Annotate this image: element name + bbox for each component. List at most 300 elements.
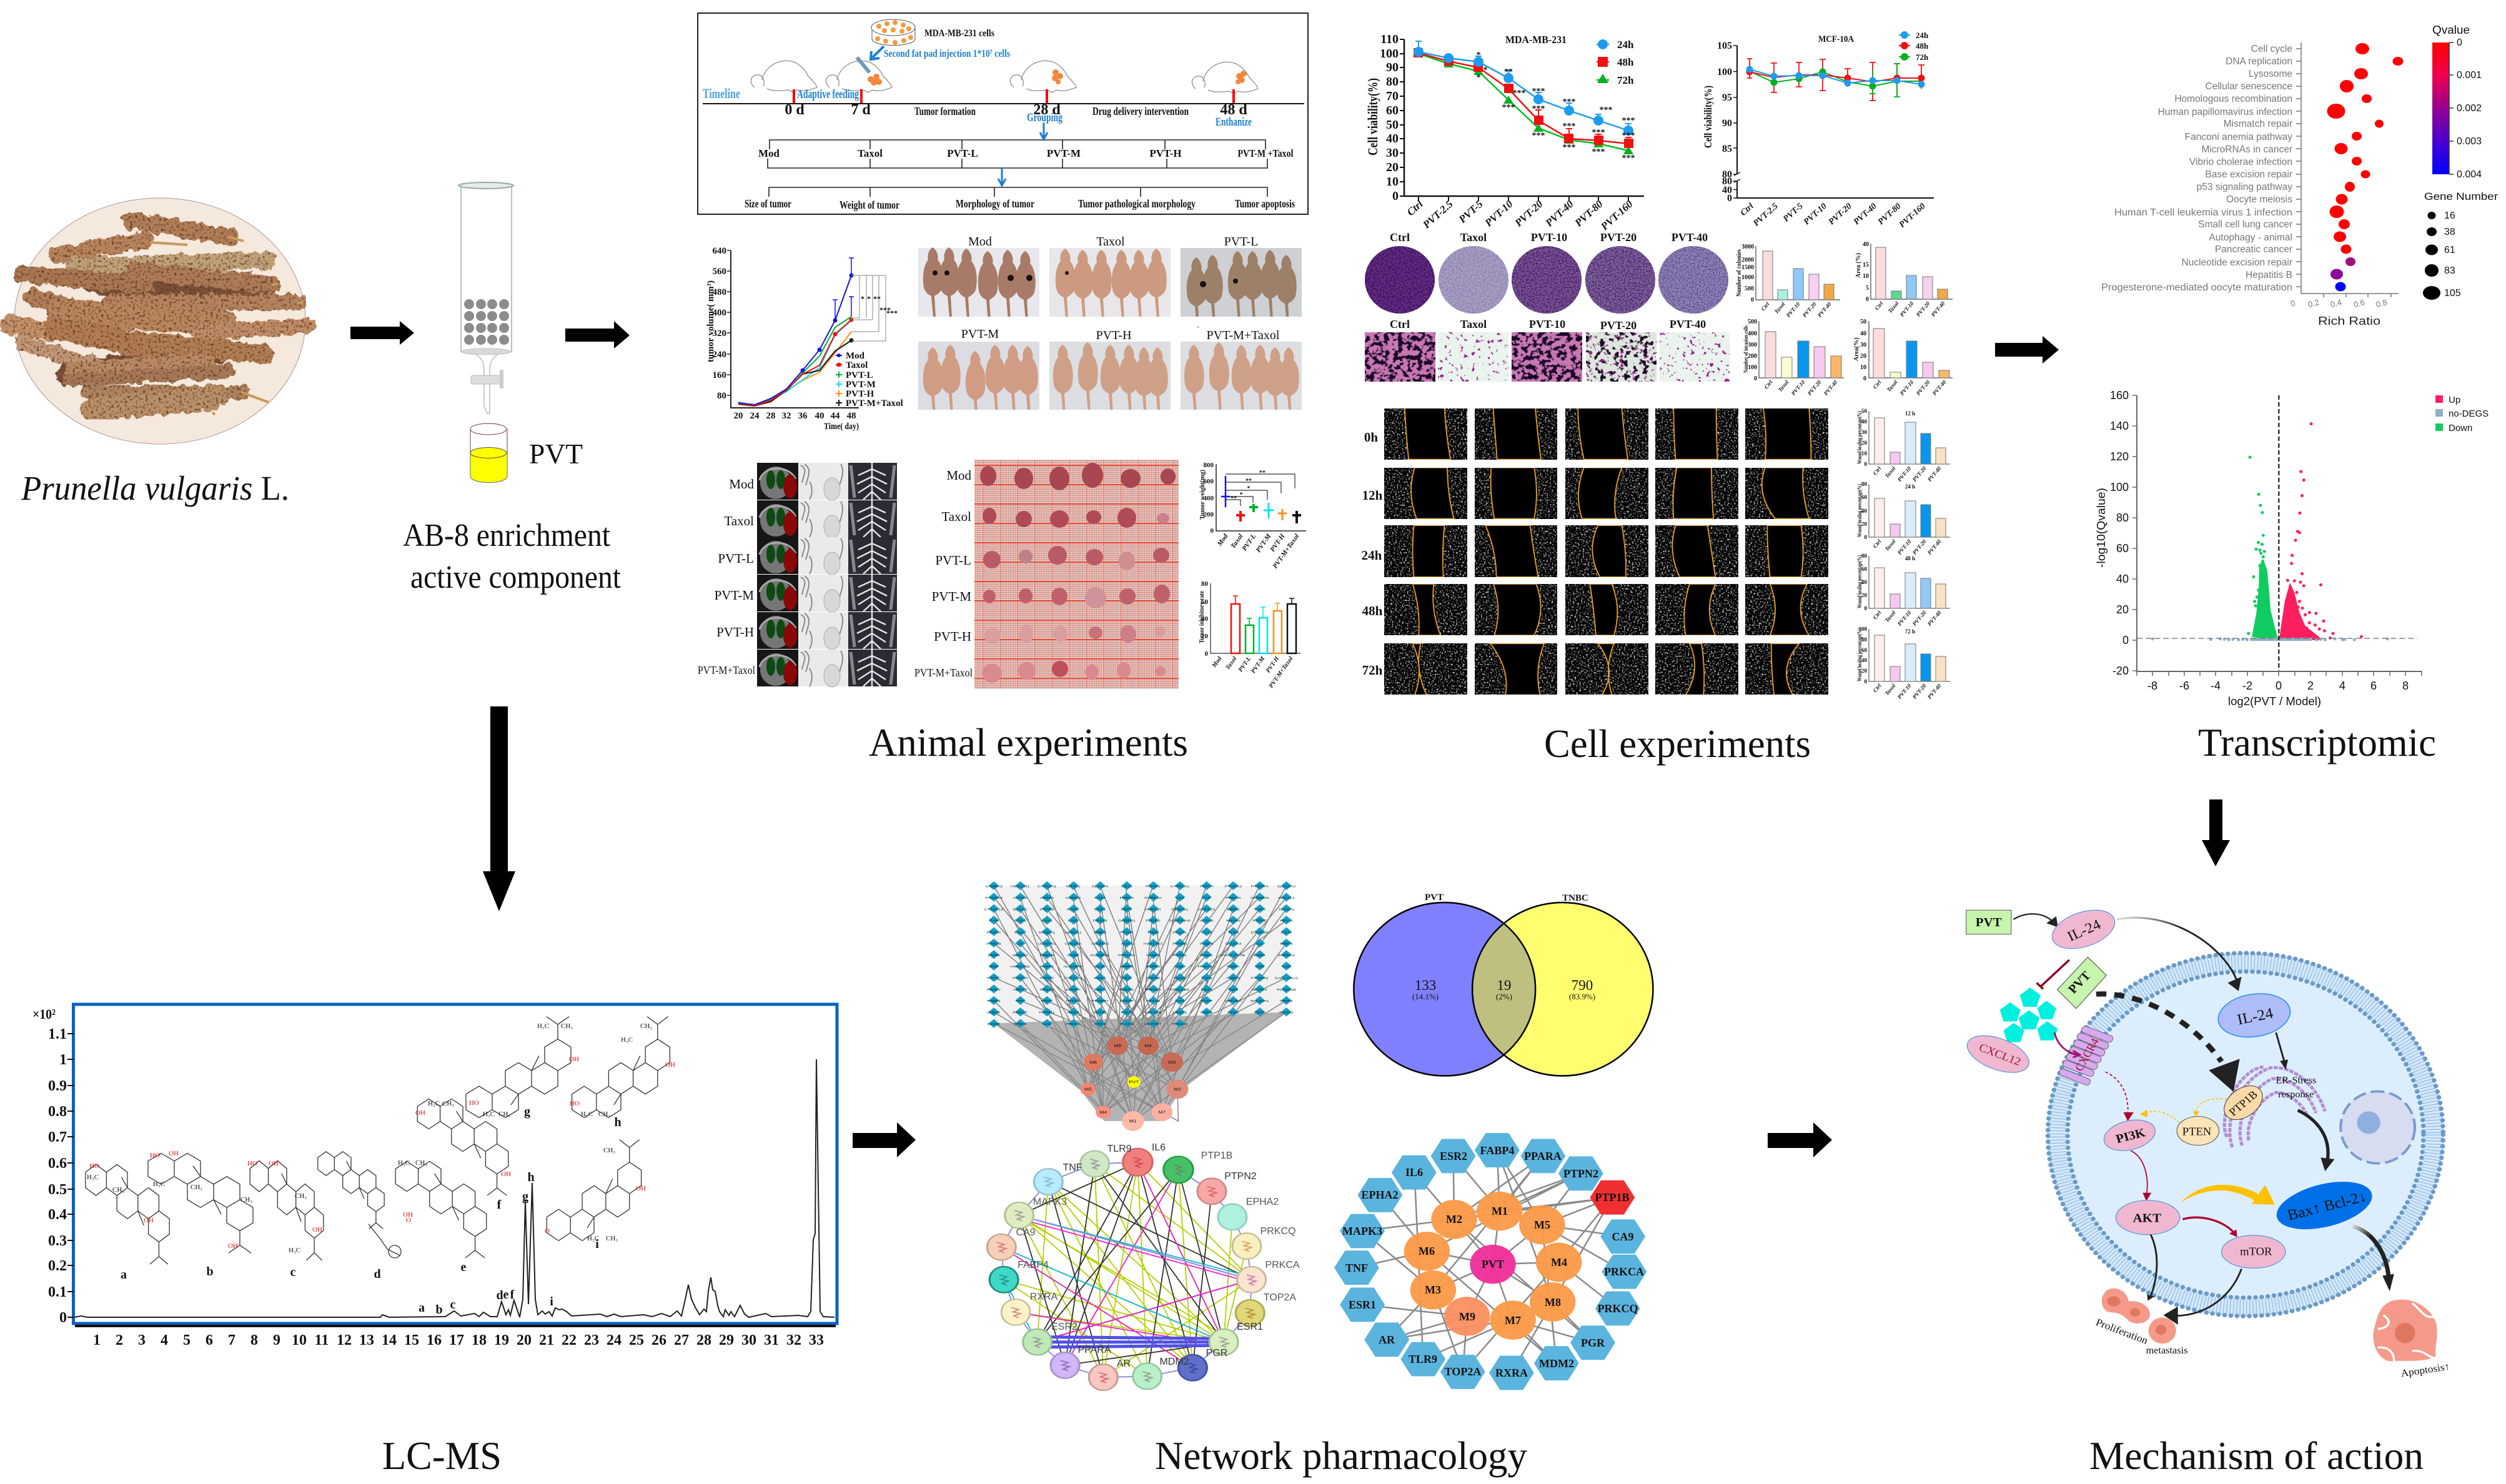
- chemical structures a to i: OH: [269, 1160, 279, 1167]
- arrow: chemokine to receptor: [2054, 1032, 2080, 1057]
- target labels: MMP12: [1013, 954, 1028, 957]
- chart: wound healing 72 h: 20: [1861, 668, 1868, 674]
- outcome labels: Apoptosis↑: [2400, 1360, 2451, 1379]
- inner module circles: [1404, 1192, 1582, 1340]
- target labels: PLA2G1B: [1277, 989, 1296, 992]
- protein labels: TOP2A: [1264, 1292, 1296, 1303]
- heading: network pharmacology: Network pharmacology: [1155, 1433, 1527, 1478]
- network labels: M7: [1505, 1314, 1521, 1327]
- chart: tumor inhibitory rate: PVT-L: [1237, 655, 1252, 673]
- chart: tumor weight scatter: PVT-H: [1269, 532, 1287, 553]
- chart: number of colonies: 0: [1751, 297, 1754, 304]
- chart: tumor weight scatter: *: [1247, 485, 1251, 492]
- arrow: AKT to mTOR: [2182, 1217, 2237, 1237]
- chart: invasion cells: [1743, 319, 1844, 397]
- gene number legend: 83: [2444, 265, 2455, 276]
- chart: KEGG bubble plot: 0.2: [2307, 297, 2320, 309]
- chart: LC-MS chromatogram: 32: [786, 1332, 801, 1348]
- arrow: network to mechanism: [1768, 1122, 1832, 1157]
- gene number legend: 105: [2444, 288, 2461, 299]
- target labels: PTGIR: [1120, 931, 1134, 934]
- chart: LC-MS chromatogram: 29: [719, 1332, 734, 1348]
- target labels: PRKCH: [1013, 977, 1028, 980]
- target labels: UGMAR1: [1038, 942, 1057, 946]
- panel: mechanism of action diagram: [1962, 903, 2451, 1379]
- cell membrane: [2048, 953, 2443, 1316]
- chart: KEGG bubble plot: Rich Ratio: [2318, 315, 2380, 327]
- panel: experiment timeline: Tumor pathological morphology: [1078, 197, 1196, 210]
- arrow: down to LC-MS: [483, 706, 515, 911]
- network labels: PVT: [1482, 1258, 1504, 1270]
- chart: MCF-10A viability: Cell viability(%): [1702, 86, 1714, 148]
- chart: invasion cells: PVT-40: [1823, 378, 1839, 397]
- chart: MDA-MB-231 viability: 20: [1386, 161, 1399, 174]
- target labels: PTPN1: [1173, 954, 1187, 957]
- module nodes: PVT: [1129, 1080, 1139, 1084]
- protein labels: PRKCA: [1265, 1260, 1300, 1270]
- arrow: IL-24 to ER: [2276, 1032, 2288, 1070]
- chart: wound healing 24 h: PVT-10: [1896, 538, 1913, 556]
- network labels: M6: [1419, 1245, 1435, 1257]
- chart: wound healing 48 h: [1856, 553, 1950, 627]
- chart: number of colonies: 2000: [1741, 257, 1754, 264]
- target labels: NOS3: [1067, 1011, 1079, 1014]
- chart: MDA-MB-231 viability: 30: [1386, 146, 1399, 160]
- network labels: [1342, 1144, 1644, 1379]
- chart: MDA-MB-231 viability: ***: [1622, 131, 1635, 141]
- chart: MDA-MB-231 viability: 90: [1386, 61, 1399, 74]
- target labels: AKR1C2: [1198, 908, 1216, 911]
- outer target hexagons: [1334, 1133, 1647, 1390]
- target labels: TOP2A: [1199, 885, 1214, 888]
- chart: tumor volume: 24: [750, 411, 760, 421]
- chemical structures a to i: b: [206, 1265, 214, 1279]
- chemical structures a to i: HO: [150, 1152, 160, 1159]
- target labels: TLR9: [1228, 931, 1239, 934]
- panel: mouse photographs: PVT-L: [1224, 235, 1258, 249]
- MDA legend: 72h: [1617, 74, 1634, 86]
- chart: wound healing 72 h: 60: [1861, 647, 1868, 653]
- panel: mouse photographs: [912, 235, 1305, 422]
- chart: wound healing 12 h: Taxol: [1884, 465, 1897, 479]
- chart: volcano plot: 140: [2110, 420, 2129, 432]
- chart: invasion area: PVT-20: [1915, 378, 1931, 397]
- target labels: POLYA: [1173, 931, 1187, 934]
- grid row labels: Mod: [946, 468, 971, 483]
- Qvalue colour bar: 0.003: [2457, 136, 2482, 147]
- chart: tumor inhibitory rate: [1199, 580, 1300, 690]
- panel: experiment timeline: [698, 13, 1308, 214]
- chart: invasion area: Taxol: [1886, 378, 1899, 393]
- chart: volcano plot: -20: [2112, 665, 2129, 677]
- chart: number of colonies: PVT-20: [1801, 300, 1818, 319]
- PI3K: [2101, 1115, 2159, 1155]
- chart: number of colonies: 1000: [1741, 274, 1754, 281]
- chart: MDA-MB-231 viability: PVT-80: [1572, 198, 1605, 229]
- chart: LC-MS chromatogram: 8: [250, 1332, 258, 1348]
- chart: MDA-MB-231 viability: 80: [1386, 75, 1399, 89]
- chart: KEGG bubble plot: Progesterone-mediated oocyte maturation: [2101, 282, 2292, 293]
- chart: KEGG bubble plot: Human T-cell leukemia virus 1 infection: [2114, 207, 2292, 218]
- protein labels: PTP1B: [1201, 1150, 1232, 1161]
- target labels: PRKC: [1041, 1000, 1053, 1003]
- chart: LC-MS chromatogram: 16: [427, 1332, 442, 1348]
- CXCL12 pentagons: [2000, 987, 2058, 1042]
- chart: colony area: 40: [1863, 241, 1869, 248]
- panel: experiment timeline: 28 d: [1033, 102, 1061, 118]
- chart: tumor volume: 44: [831, 411, 840, 421]
- chart: tumor weight scatter: 800: [1203, 462, 1214, 469]
- protein structures in nodes: [997, 1157, 1256, 1383]
- target labels: ABCC9: [1013, 989, 1028, 992]
- target labels: BACE1: [1013, 908, 1028, 911]
- chart: MDA-MB-231 viability: ***: [1622, 154, 1635, 163]
- chart: tumor inhibitory rate: 60: [1201, 598, 1208, 606]
- chart: invasion cells: Number of invasion cells: [1743, 325, 1749, 373]
- target labels: PTGDR2: [1251, 977, 1269, 980]
- chart: colony area: 10: [1863, 273, 1869, 280]
- panel: experiment timeline: Adaptive feeding: [797, 87, 859, 101]
- chart: wound healing 12 h: 20: [1861, 440, 1868, 446]
- chart: colony area: Area (%): [1855, 253, 1862, 278]
- chart: MCF-10A viability: 80: [1722, 169, 1732, 180]
- chart: volcano plot: 100: [2110, 481, 2129, 493]
- panel: micro-CT images: [698, 463, 897, 687]
- chart: tumor volume: 36: [798, 411, 808, 421]
- extraction caption: active component: [410, 560, 621, 595]
- target labels: PGR: [1229, 989, 1239, 992]
- target labels: SAE1 UBA2: [1275, 977, 1299, 980]
- chart: tumor weight scatter: Tumor weight(mg): [1199, 470, 1206, 520]
- PTEN: [2177, 1116, 2219, 1145]
- target labels: PRKCG: [1226, 897, 1241, 900]
- chart: LC-MS chromatogram: 7: [228, 1332, 235, 1348]
- chart: MDA-MB-231 viability: ***: [1532, 87, 1545, 96]
- target labels: PDE1B: [1040, 954, 1054, 957]
- chart legend: PVT-M: [846, 380, 876, 390]
- target labels: CES1: [1121, 885, 1133, 888]
- chart: MCF-10A viability: PVT-2.5: [1751, 202, 1780, 229]
- network labels: M5: [1534, 1219, 1550, 1231]
- chart: LC-MS chromatogram: 0.8: [48, 1104, 67, 1120]
- panel: experiment timeline: MDA-MB-231 cells: [924, 28, 994, 39]
- chemical structures a to i: d: [374, 1267, 381, 1281]
- chart legend: PVT-L: [846, 370, 873, 380]
- chart: invasion cells: 200: [1748, 353, 1757, 360]
- chart: MCF-10A viability: PVT-5: [1781, 202, 1805, 224]
- chart: colony area: 0: [1866, 296, 1869, 303]
- wound time labels: 48h: [1362, 603, 1383, 618]
- chart: KEGG bubble plot: Lysosome: [2249, 69, 2292, 79]
- target labels: MMP9: [1121, 966, 1134, 969]
- peak labels: [418, 1170, 553, 1317]
- wound time labels: 24h: [1362, 548, 1382, 563]
- target labels: NPC1L1: [1278, 897, 1295, 900]
- chart: LC-MS chromatogram: 0.9: [48, 1078, 67, 1094]
- chart: invasion cells: 400: [1748, 330, 1757, 337]
- chart: LC-MS chromatogram: 0.1: [48, 1284, 67, 1300]
- PVT box rotated: PVT: [2066, 969, 2094, 996]
- target labels: KDRA: [1094, 977, 1106, 980]
- target labels: AGTR1: [1013, 897, 1028, 900]
- PVT box top: [1966, 910, 2011, 934]
- chart: MDA-MB-231 viability: *: [1477, 51, 1480, 60]
- chart: LC-MS chromatogram: 5: [183, 1332, 191, 1348]
- target labels: GFBAB1: [1171, 908, 1189, 911]
- chemical structures a to i: H₃C: [483, 1111, 495, 1118]
- chart: volcano plot: -8: [2147, 680, 2157, 692]
- chart: invasion cells: 100: [1748, 364, 1757, 371]
- peak labels: e: [503, 1288, 509, 1302]
- protein labels: [1016, 1142, 1300, 1369]
- target labels: PTGER4: [1251, 885, 1269, 888]
- target labels: CA11: [1068, 919, 1079, 923]
- chart: MDA-MB-231 viability: 100: [1380, 47, 1399, 61]
- chart legend: Taxol: [846, 360, 868, 370]
- Qvalue colour bar: 0.001: [2457, 70, 2482, 81]
- target labels: THRB: [1147, 931, 1159, 934]
- chart: colony area: PVT-20: [1915, 300, 1931, 318]
- panel: transwell images: [1365, 318, 1730, 382]
- chart: wound healing 24 h: 20: [1861, 521, 1868, 527]
- chart: LC-MS chromatogram: 3: [138, 1332, 146, 1348]
- panel: colony formation plates: Taxol: [1460, 231, 1487, 244]
- chart: MDA-MB-231 viability: *: [1483, 66, 1488, 75]
- panel: colony formation plates: PVT-10: [1531, 231, 1567, 244]
- CT row labels: PVT-H: [716, 625, 754, 640]
- chemical structures a to i: O: [545, 1227, 550, 1235]
- AKT: [2116, 1200, 2180, 1235]
- chart: invasion area: 20: [1860, 353, 1866, 360]
- target labels: ADORA3: [1091, 942, 1109, 946]
- target labels: GRIK2: [1014, 1022, 1027, 1026]
- chart: KEGG bubble plot: MicroRNAs in cancer: [2201, 144, 2292, 155]
- network labels: AR: [1379, 1333, 1395, 1346]
- protein labels: PPARA: [1077, 1345, 1111, 1355]
- chart: tumor weight scatter: **: [1246, 478, 1252, 485]
- inhibition bar: [2037, 960, 2069, 989]
- module nodes: [1081, 1036, 1189, 1131]
- outcome labels: metastasis: [2146, 1345, 2187, 1356]
- target labels: NR3C1: [1066, 885, 1081, 888]
- chart legend: PVT-M+Taxol: [846, 398, 903, 408]
- network labels: M2: [1446, 1213, 1462, 1225]
- target labels: RCHB: [1094, 1011, 1106, 1014]
- mTOR: [2222, 1235, 2286, 1268]
- chart: number of colonies: 1500: [1741, 264, 1754, 271]
- panel: experiment timeline: 0 d: [785, 102, 805, 118]
- panel: experiment timeline: Grouping: [1027, 111, 1062, 124]
- chemical structures a to i: i: [595, 1237, 599, 1251]
- chart: MCF-10A viability: 90: [1722, 118, 1732, 129]
- chart: tumor volume: 560: [712, 267, 726, 277]
- arrow: AKT to Bax: [2181, 1185, 2275, 1205]
- chart: volcano plot: -log10(Qvalue): [2095, 488, 2107, 568]
- target labels: NR1I3: [1280, 919, 1293, 923]
- chart: KEGG bubble plot: Hepatitis B: [2246, 270, 2292, 280]
- gene number legend: [2423, 190, 2498, 300]
- chart: wound healing 48 h: 80: [1861, 553, 1868, 559]
- IL-24 extracellular: IL-24: [2065, 917, 2104, 945]
- chemical structures a to i: g: [524, 1105, 530, 1119]
- target labels: PDPT: [1121, 908, 1132, 911]
- panel: mouse photographs: Taxol: [1096, 235, 1125, 249]
- nucleus: [2340, 1091, 2415, 1164]
- chart: KEGG bubble plot: Base excision repair: [2205, 169, 2292, 180]
- network labels: PGR: [1581, 1337, 1605, 1349]
- target labels: FABP3: [1040, 966, 1054, 969]
- chart: invasion area: [1853, 319, 1953, 397]
- panel: experiment timeline: Tumor apoptosis: [1235, 197, 1295, 210]
- chart: LC-MS chromatogram: 26: [651, 1332, 666, 1348]
- target labels: FABP1: [987, 1000, 1001, 1003]
- chart: LC-MS chromatogram: 28: [696, 1332, 711, 1348]
- chart: tumor inhibitory rate: PVT-H: [1265, 655, 1281, 675]
- target labels: PPARG: [1146, 885, 1161, 888]
- panel: experiment timeline: Enthanize: [1216, 116, 1252, 129]
- network labels: CA9: [1612, 1230, 1634, 1243]
- target labels: SRD5A1: [1039, 931, 1056, 934]
- chart: MCF-10A viability: 80: [1722, 176, 1732, 187]
- chart: volcano plot: log2(PVT / Model): [2228, 695, 2321, 708]
- target labels: PTGS: [1014, 919, 1026, 923]
- protein labels: EPHA2: [1246, 1197, 1279, 1207]
- chart: tumor volume: ***: [879, 305, 891, 314]
- chart: MDA-MB-231 viability: ***: [1532, 131, 1545, 141]
- chart legend: PVT-H: [846, 389, 874, 399]
- target labels: SLC10A2: [1277, 885, 1296, 888]
- chart: LC-MS chromatogram: 1.1: [48, 1026, 67, 1042]
- network labels: FABP4: [1480, 1144, 1514, 1157]
- volcano legend: Down: [2449, 423, 2472, 433]
- chart: tumor volume: Time( day): [824, 422, 859, 432]
- chemical structures a to i: CH₃: [561, 1022, 573, 1030]
- chart: invasion area: Ctrl: [1872, 378, 1883, 390]
- target labels: PDE4D: [1146, 977, 1161, 980]
- chart: LC-MS chromatogram: 0: [59, 1310, 67, 1326]
- heading: cell experiments: Cell experiments: [1544, 721, 1811, 766]
- chart: KEGG bubble plot: p53 signaling pathway: [2197, 182, 2292, 192]
- chart: MDA-MB-231 viability: ***: [1563, 143, 1575, 152]
- peak labels: d: [496, 1289, 503, 1302]
- target labels: FABP2: [1146, 954, 1160, 957]
- chemical structures a to i: OH: [228, 1242, 238, 1250]
- target labels: CA5A: [1174, 966, 1186, 969]
- IL-24 intracellular: IL-24: [2236, 1005, 2275, 1028]
- chart: Venn diagram: (2%): [1496, 992, 1512, 1001]
- chart: colony area: PVT-10: [1899, 300, 1915, 318]
- icon: chromatography column: [458, 182, 513, 413]
- panel: experiment timeline: PVT-H: [1149, 147, 1182, 159]
- chart: tumor inhibitory rate: Tumor inhibitory rate: [1199, 591, 1206, 643]
- panel: colony formation plates: PVT-40: [1671, 231, 1708, 244]
- IL-24 extracellular: [2046, 903, 2121, 956]
- chemical structures a to i: OH: [569, 1056, 579, 1063]
- module nodes: M4: [1099, 1110, 1107, 1115]
- chemical structures a to i: e: [461, 1260, 467, 1274]
- panel: STRING protein network: [987, 1142, 1300, 1390]
- target labels: PLCG1: [1120, 1022, 1134, 1026]
- chart: MDA-MB-231 viability: 40: [1386, 132, 1399, 146]
- PVT box rotated: [2058, 957, 2106, 1009]
- target labels: ESRRA: [1066, 989, 1081, 992]
- target labels: CYP19A1: [1038, 885, 1057, 888]
- chemical structures a to i: H₃C: [581, 1111, 593, 1118]
- chart: volcano plot: 4: [2339, 680, 2345, 692]
- target labels: RCHY: [1201, 1000, 1212, 1003]
- target labels: GABRA2: [985, 885, 1003, 888]
- arrow: dashed receptor to PI3K: [2105, 1072, 2134, 1121]
- chart: wound healing 72 h: PVT-20: [1911, 682, 1928, 700]
- heading: transcriptomic: Transcriptomic: [2198, 720, 2436, 764]
- chart: tumor weight scatter: PVT-M: [1255, 532, 1273, 554]
- protein nodes: [987, 1149, 1266, 1390]
- gene number legend: 61: [2444, 245, 2455, 255]
- chart: wound healing 12 h: 12 h: [1905, 410, 1915, 417]
- panel: mouse photographs: PVT-M: [961, 327, 999, 341]
- panel: experiment timeline: Timeline: [703, 86, 740, 101]
- chart: LC-MS chromatogram: 0.5: [48, 1182, 67, 1198]
- chart: volcano plot: -6: [2179, 680, 2189, 692]
- chart: LC-MS chromatogram: 33: [809, 1332, 824, 1348]
- chart: LC-MS chromatogram: 0.3: [48, 1233, 67, 1249]
- chemical structures a to i: CH₃: [603, 1147, 615, 1154]
- arrow: Bax to apoptosis: [2352, 1226, 2394, 1291]
- chart: LC-MS chromatogram: 20: [517, 1332, 532, 1348]
- Qvalue colour bar: [2432, 24, 2482, 180]
- chart: LC-MS chromatogram: 0.6: [48, 1155, 67, 1172]
- outcome labels: Proliferation: [2094, 1316, 2150, 1347]
- chart: number of colonies: Number of colonies: [1736, 249, 1743, 297]
- target labels: TERT: [1254, 1011, 1265, 1014]
- chart: MDA-MB-231 viability: 0: [1392, 189, 1399, 203]
- chart: KEGG bubble plot: 0: [2289, 298, 2296, 309]
- chart: LC-MS chromatogram: 23: [584, 1332, 599, 1348]
- protein edges: [1001, 1162, 1252, 1377]
- panel: experiment timeline: PVT-M: [1047, 147, 1081, 159]
- network labels: IL6: [1405, 1166, 1423, 1179]
- target labels: CYP17A1: [1064, 977, 1083, 980]
- gene number legend: 38: [2444, 227, 2455, 237]
- target labels: CES2: [1201, 989, 1212, 992]
- chart: Venn diagram: 19: [1497, 977, 1512, 993]
- module nodes: M5: [1084, 1087, 1092, 1092]
- chart: tumor weight scatter: 600: [1203, 478, 1214, 485]
- wound time labels: [1362, 430, 1383, 678]
- target labels: PLA2G4A: [1091, 954, 1109, 957]
- network labels: M1: [1492, 1205, 1508, 1217]
- arrow: ER to Bax: [2298, 1111, 2334, 1171]
- chart: MCF-10A viability: Ctrl: [1739, 202, 1756, 218]
- chart: MDA-MB-231 viability: ***: [1592, 128, 1605, 137]
- network labels: TNF: [1345, 1262, 1368, 1274]
- apoptotic cell: [2373, 1300, 2437, 1362]
- chart: MDA-MB-231 viability: [1365, 32, 1644, 233]
- chart: wound healing 24 h: 24 h: [1905, 483, 1915, 490]
- target labels: HR3C1: [1172, 1011, 1187, 1014]
- chart: number of colonies: Taxol: [1773, 300, 1786, 315]
- MCF legend: [1899, 31, 1929, 62]
- PI3K: PI3K: [2114, 1126, 2147, 1146]
- target labels: MDM2: [1227, 908, 1240, 911]
- chart: invasion area: PVT-40: [1931, 378, 1948, 397]
- panel: experiment timeline: 48 d: [1220, 102, 1247, 118]
- chart: volcano plot: 0: [2276, 680, 2282, 692]
- target labels: PSEN1: [1120, 989, 1134, 992]
- network labels: PPARA: [1524, 1150, 1562, 1162]
- panel: mouse photographs: PVT-H: [1096, 329, 1132, 342]
- chart: wound healing 48 h: 60: [1861, 566, 1868, 572]
